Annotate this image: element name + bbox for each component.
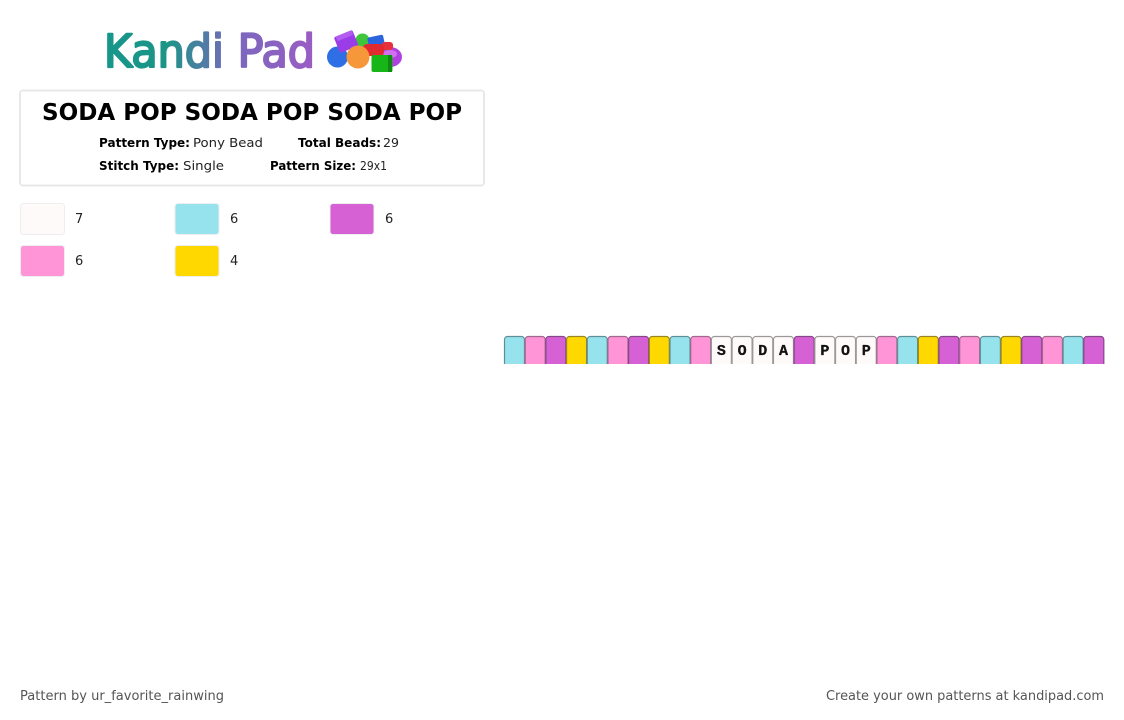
logo	[104, 25, 402, 78]
icon: pile of beads	[327, 30, 402, 72]
legend: cyan 6	[175, 204, 238, 234]
stitch type: Single	[183, 158, 224, 173]
legend: white 7: 7	[75, 212, 83, 227]
pattern type: Pony Bead	[193, 135, 263, 150]
bead pattern strip: A	[779, 343, 788, 360]
legend: purple 6: 6	[385, 212, 393, 227]
panel: pattern info	[20, 90, 484, 186]
stitch type	[99, 158, 224, 173]
legend: purple 6	[330, 204, 393, 234]
legend: yellow 4: 4	[230, 254, 238, 269]
total beads: 29	[383, 135, 399, 150]
bead pattern strip: P	[820, 343, 829, 360]
pattern size: Pattern Size:	[270, 158, 356, 173]
legend: cyan 6: 6	[230, 212, 238, 227]
total beads: Total Beads:	[298, 135, 381, 150]
bead pattern strip: S	[717, 343, 726, 360]
bead pattern strip	[504, 336, 1104, 364]
bead pattern strip: D	[758, 343, 767, 360]
logo wordmark: Kandi Pad	[104, 25, 315, 78]
title: SODA POP SODA POP SODA POP	[42, 98, 462, 126]
bead pattern strip: O	[738, 343, 747, 360]
pattern type	[99, 135, 263, 150]
footer: author credit: Pattern by ur_favorite_rainwing	[20, 689, 224, 704]
bead pattern strip: P	[862, 343, 871, 360]
pattern type: Pattern Type:	[99, 135, 190, 150]
colour legend	[20, 204, 393, 276]
legend: pink 6: 6	[75, 254, 83, 269]
legend: white 7	[20, 204, 83, 234]
legend: yellow 4	[175, 246, 238, 276]
legend: pink 6	[20, 246, 83, 276]
stitch type: Stitch Type:	[99, 158, 179, 173]
pattern size: 29x1	[360, 158, 387, 173]
footer: site credit: Create your own patterns at kandipad.com	[826, 689, 1104, 704]
bead pattern strip: O	[841, 343, 850, 360]
